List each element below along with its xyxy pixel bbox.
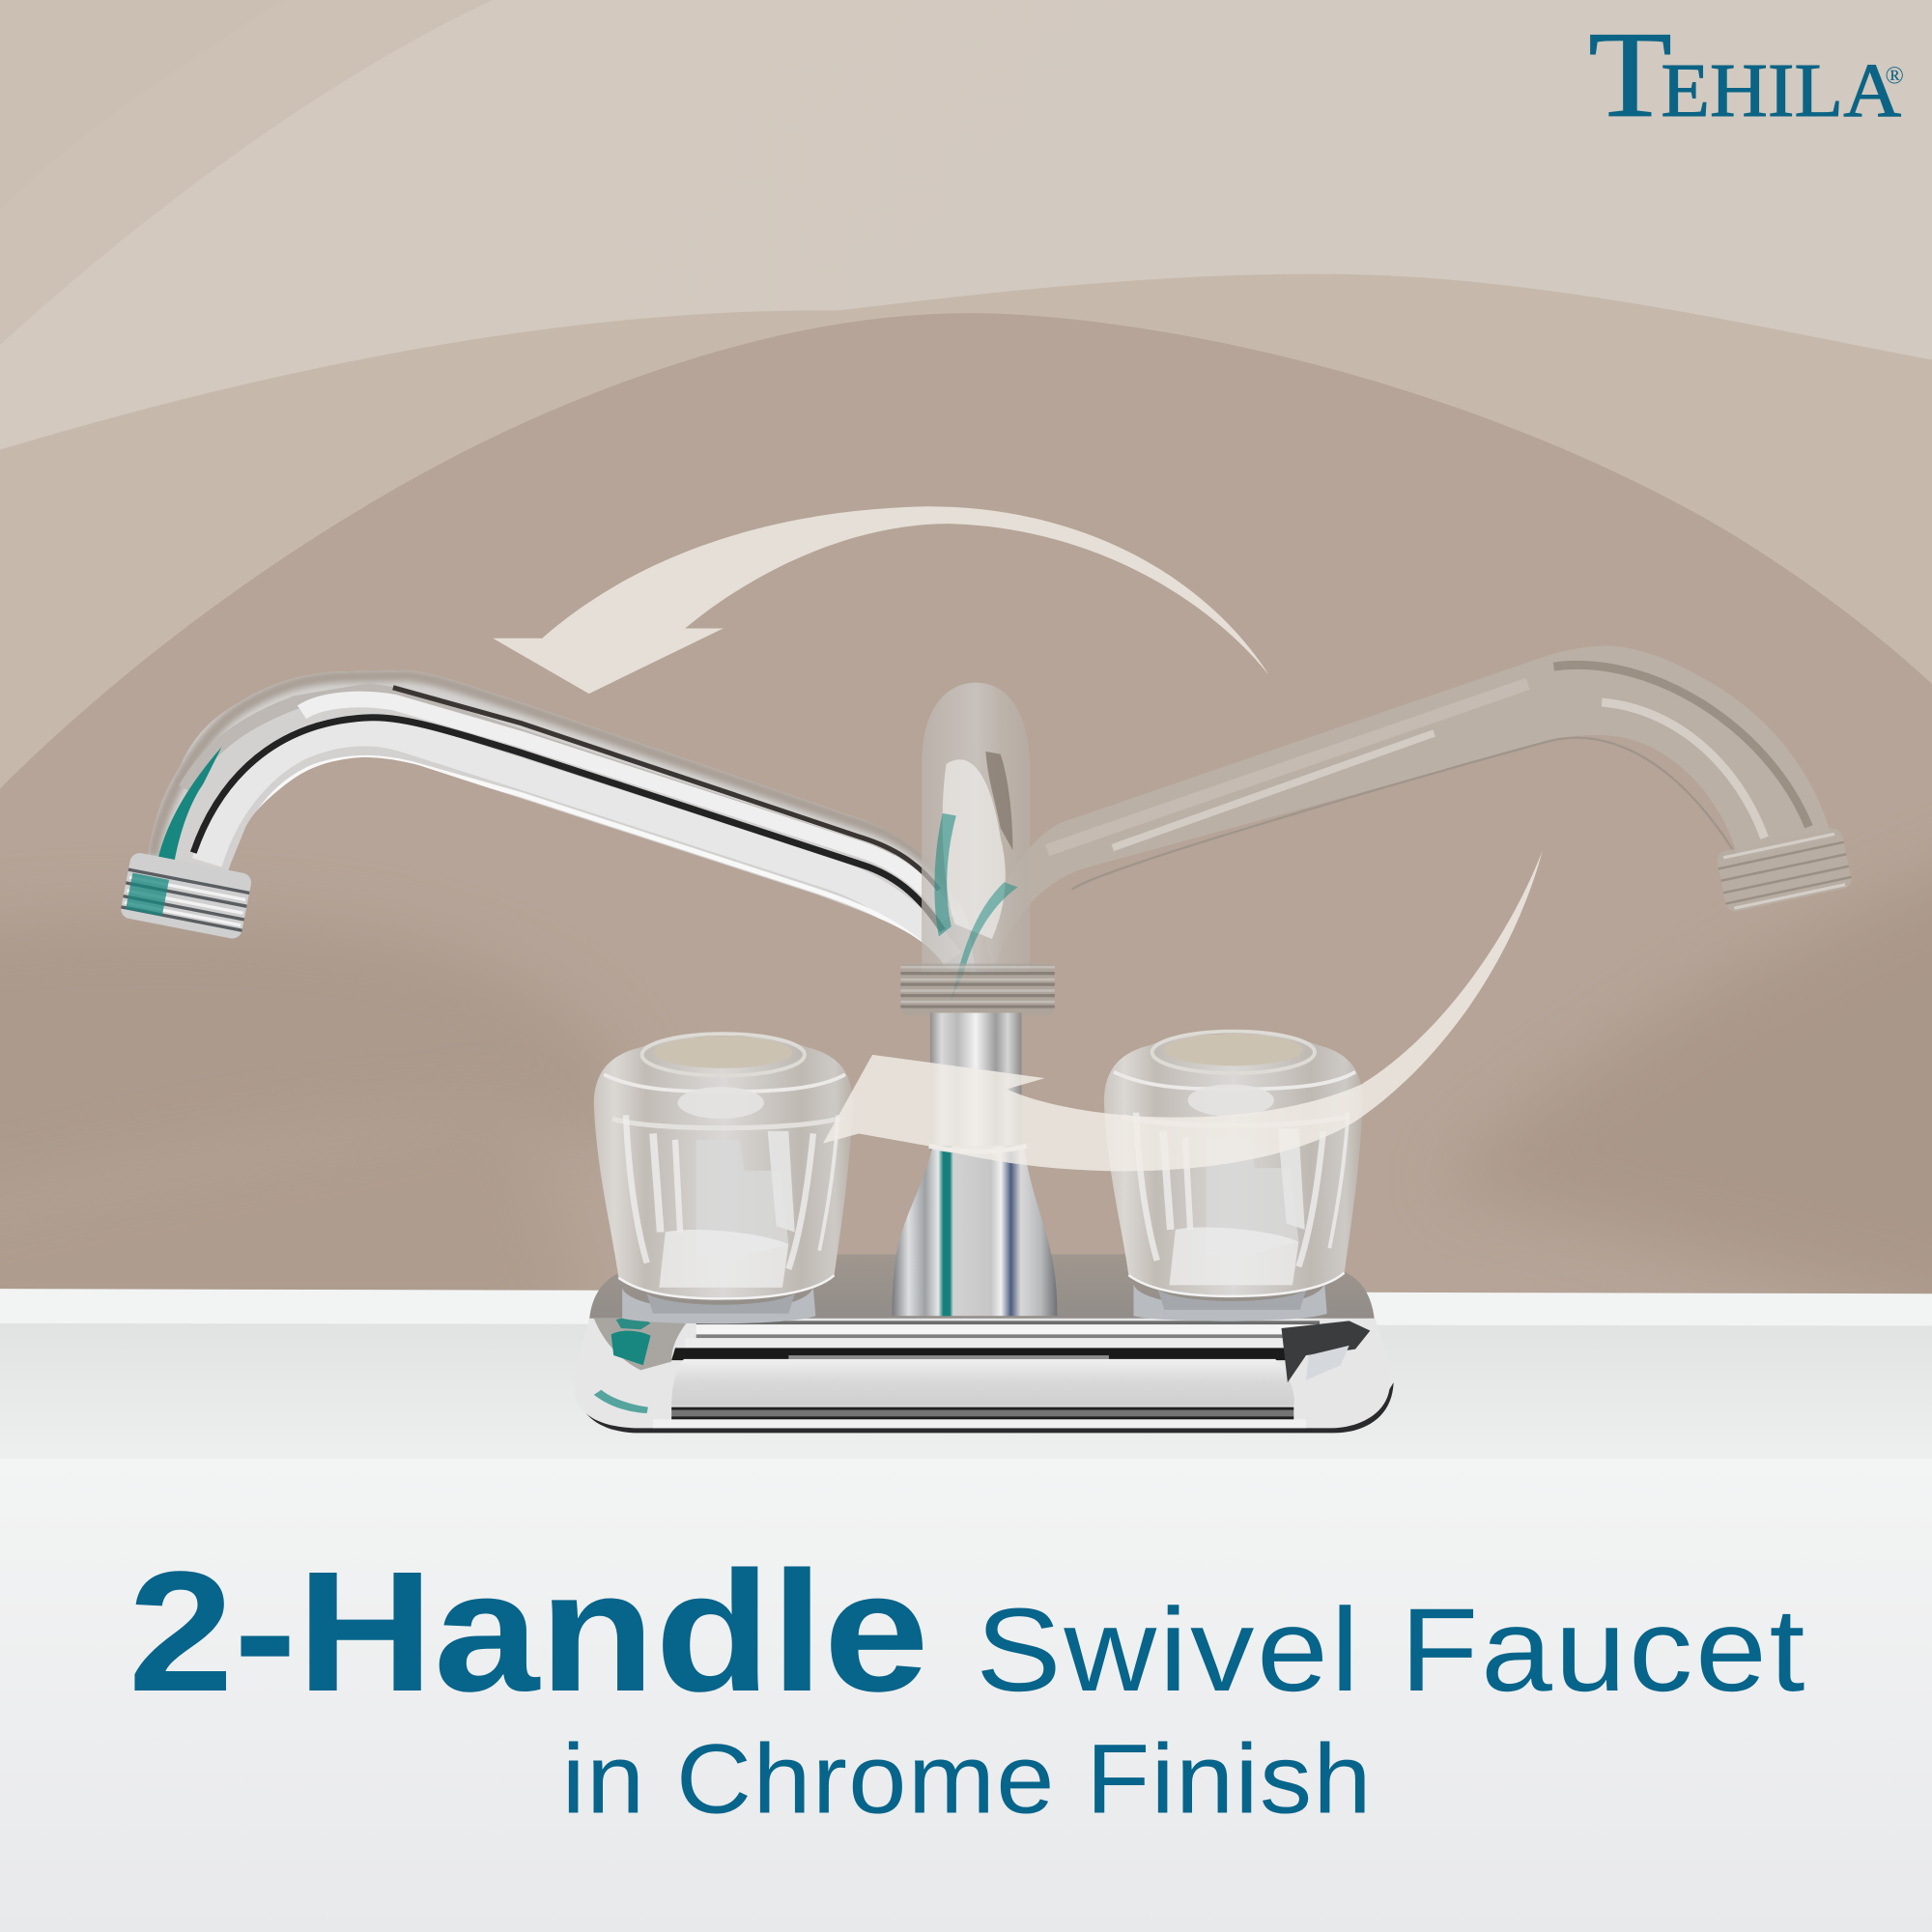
sink (0, 1289, 1932, 1932)
faucet stem (930, 1012, 1021, 1151)
chrome nut (119, 851, 253, 940)
logo: Tehila: EHILA (1661, 49, 1901, 133)
faucet stem dome (922, 683, 1030, 1001)
logo: Tehila: T (1588, 6, 1672, 143)
subheading: in Chrome Finish: in Chrome Finish (562, 1723, 1373, 1833)
headline: 2-Handle Swivel Faucet (128, 1536, 1807, 1727)
ghost spout: right position (985, 645, 1853, 974)
threaded collar (900, 963, 1055, 1015)
chrome spout: left position (119, 670, 976, 974)
plate left corner (594, 1318, 690, 1413)
plate lower stripes (653, 1407, 1306, 1428)
right handle socket (1133, 1284, 1327, 1321)
left handle socket (622, 1288, 815, 1323)
logo: Tehila (1588, 6, 1904, 143)
plate front body (574, 1319, 1390, 1428)
arrow: upper swivel arrow (493, 506, 1269, 694)
faucet base cone (892, 1146, 1057, 1316)
plate right corner (1282, 1321, 1370, 1382)
headline: 2-Handle Swivel Faucet: Swivel Faucet (976, 1583, 1807, 1716)
deck plate (574, 1318, 1394, 1433)
wall background (0, 0, 1932, 1306)
teal reflection (156, 747, 222, 865)
deck plate back surface (589, 1254, 1375, 1328)
wall shadows (0, 813, 1932, 1355)
spout reflections (153, 675, 961, 961)
logo: Tehila: ® (1886, 62, 1904, 90)
headline: 2-Handle Swivel Faucet: 2-Handle (128, 1536, 929, 1727)
arrow: lower swivel arrow (823, 850, 1543, 1171)
plate center panel (671, 1359, 1294, 1406)
right handle (1104, 1032, 1363, 1321)
ghost nut (1715, 827, 1853, 913)
left handle (594, 1034, 853, 1323)
ghost highlights (1047, 665, 1808, 890)
plate black gasket (578, 1382, 1394, 1433)
plate upper stripes (671, 1321, 1320, 1360)
